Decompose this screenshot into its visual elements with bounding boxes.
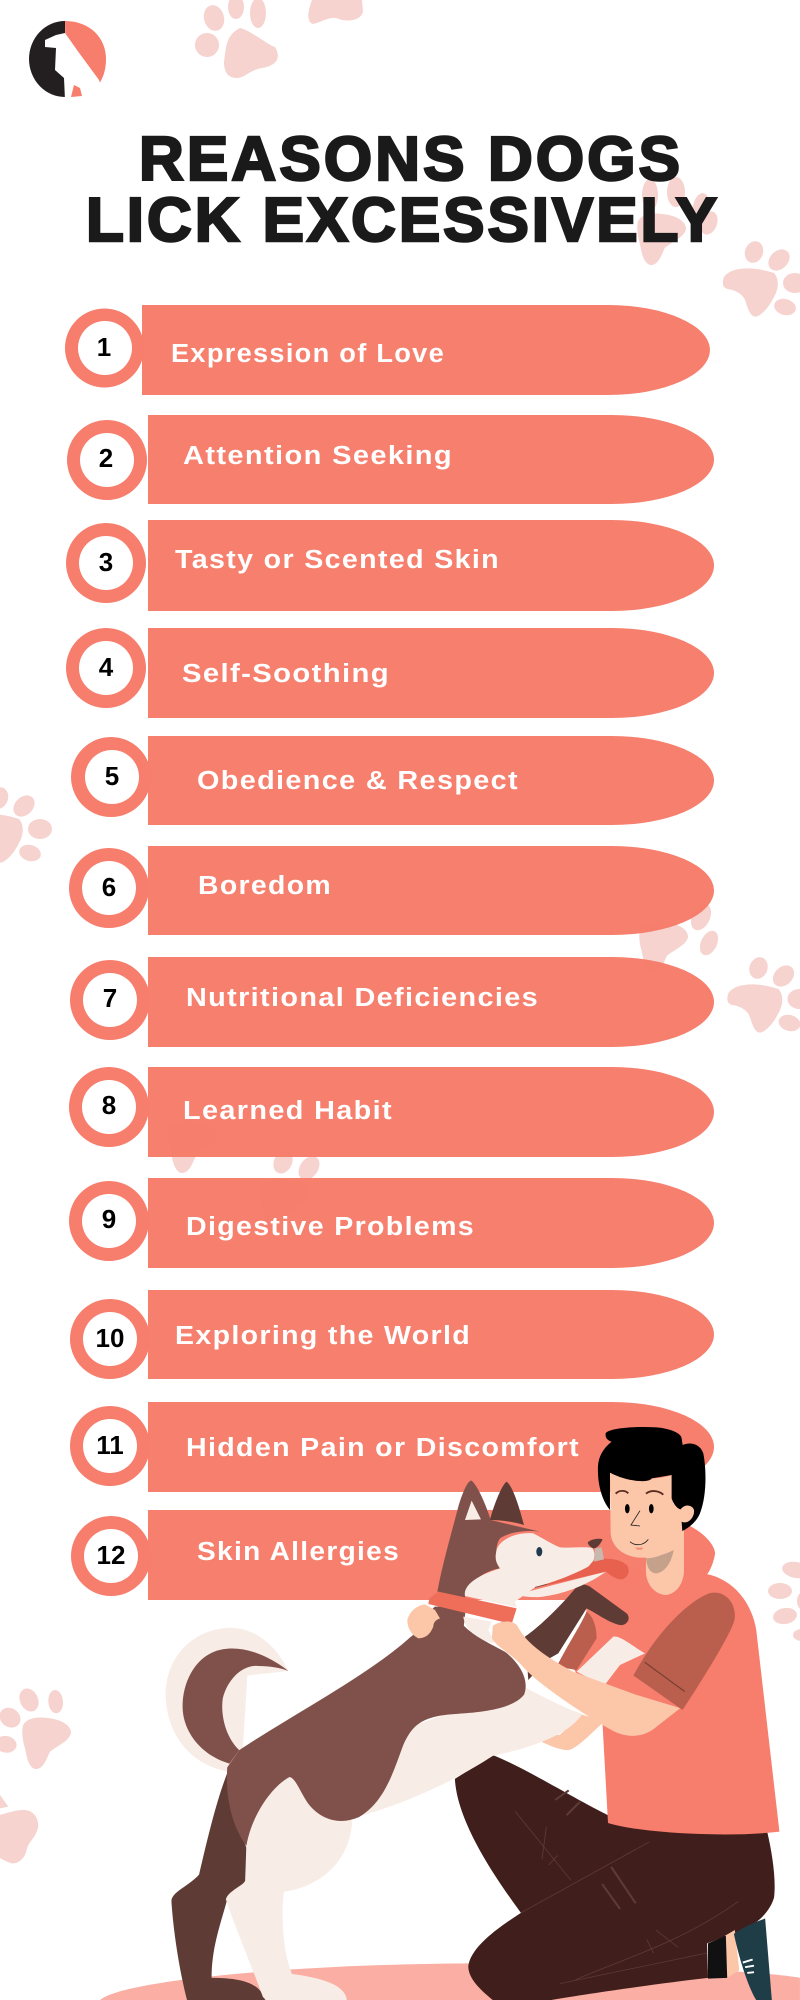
dog tail xyxy=(166,1628,288,1772)
dog body brown xyxy=(227,1607,526,1846)
reason 7: Nutritional Deficiencies: Nutritional Deficiencies xyxy=(186,984,539,1012)
man far hand xyxy=(407,1604,440,1638)
dog collar xyxy=(428,1592,517,1624)
reason 1: Expression of Love xyxy=(65,305,710,395)
reason 1: Expression of Love: 1 xyxy=(97,332,111,362)
reason 6: Boredom xyxy=(69,846,714,935)
reason 10: Exploring the World: 10 xyxy=(96,1323,124,1353)
dog hind leg white xyxy=(226,1777,352,2000)
reason 5: Obedience & Respect xyxy=(71,736,714,825)
reason 4: Self-Soothing xyxy=(66,628,714,718)
reason 7: Nutritional Deficiencies xyxy=(70,957,714,1047)
reason 2: Attention Seeking: Attention Seeking xyxy=(183,442,453,470)
reason 3: Tasty or Scented Skin: 3 xyxy=(99,547,113,577)
logo xyxy=(29,21,106,100)
ground shadow xyxy=(100,1963,800,2000)
reason 11: Hidden Pain or Discomfort xyxy=(70,1402,714,1492)
reason 12: Skin Allergies: Skin Allergies xyxy=(197,1538,400,1566)
illustration: man hugging dog xyxy=(100,1427,800,2000)
reason 5: Obedience & Respect: Obedience & Respect xyxy=(197,767,519,795)
reason 6: Boredom: 6 xyxy=(102,872,116,902)
reason 11: Hidden Pain or Discomfort: Hidden Pain or Discomfort xyxy=(186,1434,580,1462)
dog raised far leg xyxy=(525,1584,645,1686)
reason 3: Tasty or Scented Skin xyxy=(66,520,714,611)
trouser creases xyxy=(515,1790,738,1984)
man trousers xyxy=(455,1755,775,2000)
title: LICK EXCESSIVELY xyxy=(86,186,717,255)
man shoes xyxy=(708,1919,772,2000)
reason 8: Learned Habit xyxy=(69,1067,714,1157)
reason 1: Expression of Love: Expression of Love xyxy=(171,340,445,368)
reason 3: Tasty or Scented Skin: Tasty or Scented Skin xyxy=(175,546,500,574)
reason 4: Self-Soothing: Self-Soothing xyxy=(182,660,390,688)
reason 10: Exploring the World xyxy=(70,1290,714,1379)
title: REASONS DOGS xyxy=(139,125,680,194)
man sleeve xyxy=(633,1593,735,1710)
dog head xyxy=(407,1481,629,1643)
reason 2: Attention Seeking: 2 xyxy=(99,443,113,473)
dog belly white xyxy=(314,1687,582,1819)
reason 9: Digestive Problems xyxy=(69,1178,714,1268)
title xyxy=(86,125,717,255)
reason 12: Skin Allergies: 12 xyxy=(97,1540,125,1570)
reason 2: Attention Seeking xyxy=(67,415,714,504)
reason 8: Learned Habit: 8 xyxy=(102,1090,116,1120)
reason 11: Hidden Pain or Discomfort: 11 xyxy=(96,1430,124,1460)
man shirt xyxy=(573,1526,779,1834)
reason 4: Self-Soothing: 4 xyxy=(99,652,114,682)
reason 9: Digestive Problems: 9 xyxy=(102,1204,116,1234)
reason 5: Obedience & Respect: 5 xyxy=(105,761,119,791)
dog hind leg back xyxy=(171,1773,265,2000)
reason 6: Boredom: Boredom xyxy=(198,872,332,900)
reason 10: Exploring the World: Exploring the World xyxy=(175,1322,471,1350)
reason 7: Nutritional Deficiencies: 7 xyxy=(103,983,117,1013)
man far forearm xyxy=(516,1715,604,1750)
reason 12: Skin Allergies xyxy=(71,1510,714,1600)
reason 9: Digestive Problems: Digestive Problems xyxy=(186,1213,475,1241)
man head and neck xyxy=(598,1427,705,1595)
reason 8: Learned Habit: Learned Habit xyxy=(183,1097,393,1125)
man near arm xyxy=(492,1621,680,1736)
